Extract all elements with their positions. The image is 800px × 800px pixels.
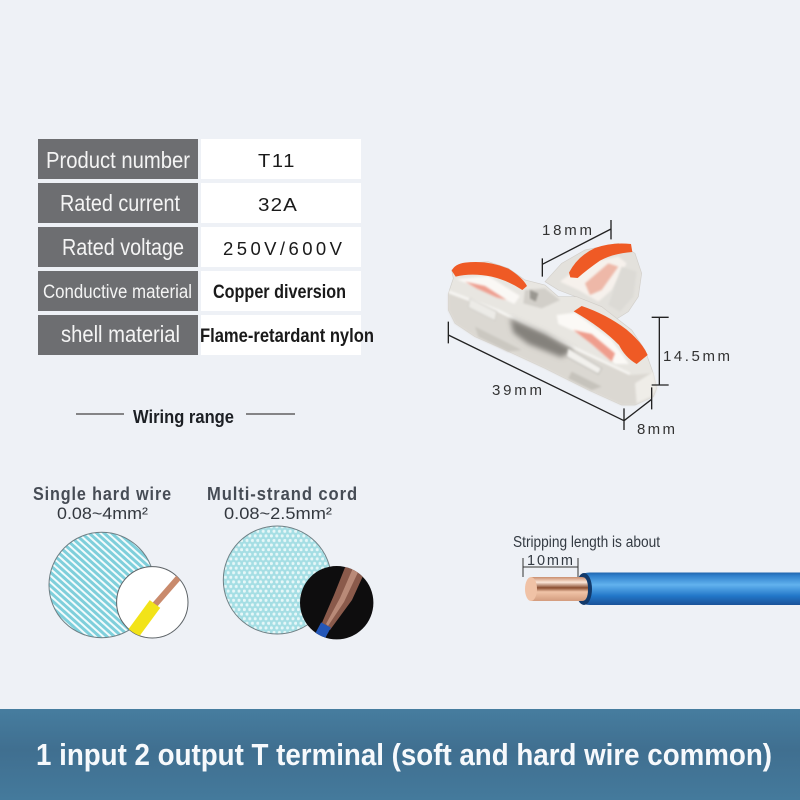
heading: wiring range: Wiring range	[133, 406, 234, 427]
left top pad	[457, 276, 520, 304]
front top pad	[557, 313, 629, 364]
row: rated current: Rated current	[60, 190, 181, 216]
label: 10 mm: 10mm	[527, 553, 573, 569]
row: rated current: 32A	[258, 194, 298, 215]
icon: copper core	[525, 577, 588, 601]
middle junction	[523, 288, 560, 308]
label: single wire range: 0.08~4mm²	[57, 505, 149, 523]
top face edge highlight	[449, 292, 630, 374]
row: shell material: Flame-retardant nylon	[200, 326, 374, 347]
row: product number: Product number	[46, 147, 190, 173]
end cap	[635, 372, 657, 403]
row: product number	[38, 139, 361, 179]
row: rated voltage: 250V/600V	[223, 238, 343, 259]
grey centre contact	[510, 318, 573, 357]
main shell	[448, 262, 657, 405]
panel: stripping length	[513, 534, 800, 605]
row: conductive material	[38, 271, 361, 311]
lower relief	[475, 327, 522, 352]
icon: dotted stranded conductor circle	[223, 526, 331, 634]
label: multi-strand cord: Multi-strand cord	[207, 484, 358, 504]
dimension lines	[448, 220, 669, 430]
label: single hard wire: Single hard wire	[33, 484, 172, 504]
panel: multi-strand cord	[207, 484, 373, 640]
icon: striped solid conductor circle	[49, 532, 154, 638]
row: product number: T11	[258, 150, 296, 171]
side windows	[468, 298, 497, 321]
icon: blue cable	[576, 572, 800, 605]
icon: stranded wire photo	[300, 565, 373, 640]
row: conductive material: Conductive material	[43, 282, 192, 303]
row: shell material	[38, 315, 374, 355]
panel: specification table	[38, 139, 374, 355]
dimension label: 18mm: 18mm	[542, 222, 592, 239]
dimension label: 8mm: 8mm	[637, 421, 675, 438]
side face	[448, 293, 657, 405]
row: rated voltage	[38, 227, 361, 267]
row: conductive material: Copper diversion	[213, 282, 346, 303]
dimension label: 39mm: 39mm	[492, 382, 542, 399]
row: rated voltage: Rated voltage	[62, 234, 184, 260]
label: multi-strand range: 0.08~2.5mm²	[224, 505, 333, 523]
row: rated current	[38, 183, 361, 223]
panel: single hard wire	[33, 484, 188, 638]
icon: solid wire photo	[117, 567, 188, 638]
orange lever front	[574, 306, 648, 364]
orange lever left	[452, 262, 527, 290]
icon: T terminal connector	[448, 220, 669, 430]
rear branch shell	[545, 243, 642, 320]
row: shell material: shell material	[61, 321, 180, 347]
label: stripping length: Stripping length is about	[513, 534, 661, 551]
dimension bracket	[523, 558, 578, 577]
banner	[0, 709, 800, 800]
orange lever rear	[569, 243, 632, 278]
dimension label: 14.5mm: 14.5mm	[663, 348, 730, 365]
